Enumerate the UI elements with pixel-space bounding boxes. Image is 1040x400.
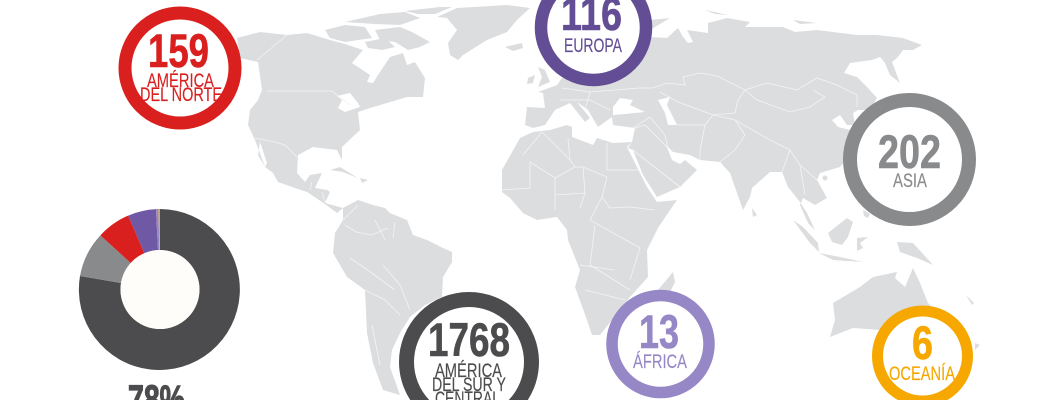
badge: Oceanía: OCEANÍA [889,364,955,385]
badge: América del Sur y Central: DEL SUR Y [432,375,506,396]
donut hole [120,250,200,329]
segment: red [100,216,144,263]
badge: América del Norte [125,13,235,123]
badge: Oceanía: 6 [912,316,933,369]
badge: América del Norte: 159 [148,24,209,77]
badge: Asia [850,100,969,219]
segment: orange [159,209,160,250]
badge: África: 13 [639,305,679,358]
badge: Europa [541,0,646,80]
segment: lavender [156,209,159,250]
badge: América del Norte: DEL NORTE [140,85,222,106]
donut chart [79,209,240,370]
badge: Asia: ASIA [893,171,927,192]
badge: África: ÁFRICA [633,352,687,373]
badge: América del Norte: AMÉRICA [147,71,214,92]
badge: Oceanía [878,311,968,400]
badge: Europa: EUROPA [564,36,622,57]
badge: América del Sur y Central: AMÉRICA [435,361,502,382]
segment: dark 78% [79,209,240,370]
segment: gray [80,235,131,283]
world map [237,5,980,395]
badge: Asia: 202 [878,125,941,178]
badge: América del Sur y Central [406,300,532,400]
segment: purple [128,209,158,253]
badge: África [612,296,709,392]
badge: América del Sur y Central: 1768 [428,313,510,366]
